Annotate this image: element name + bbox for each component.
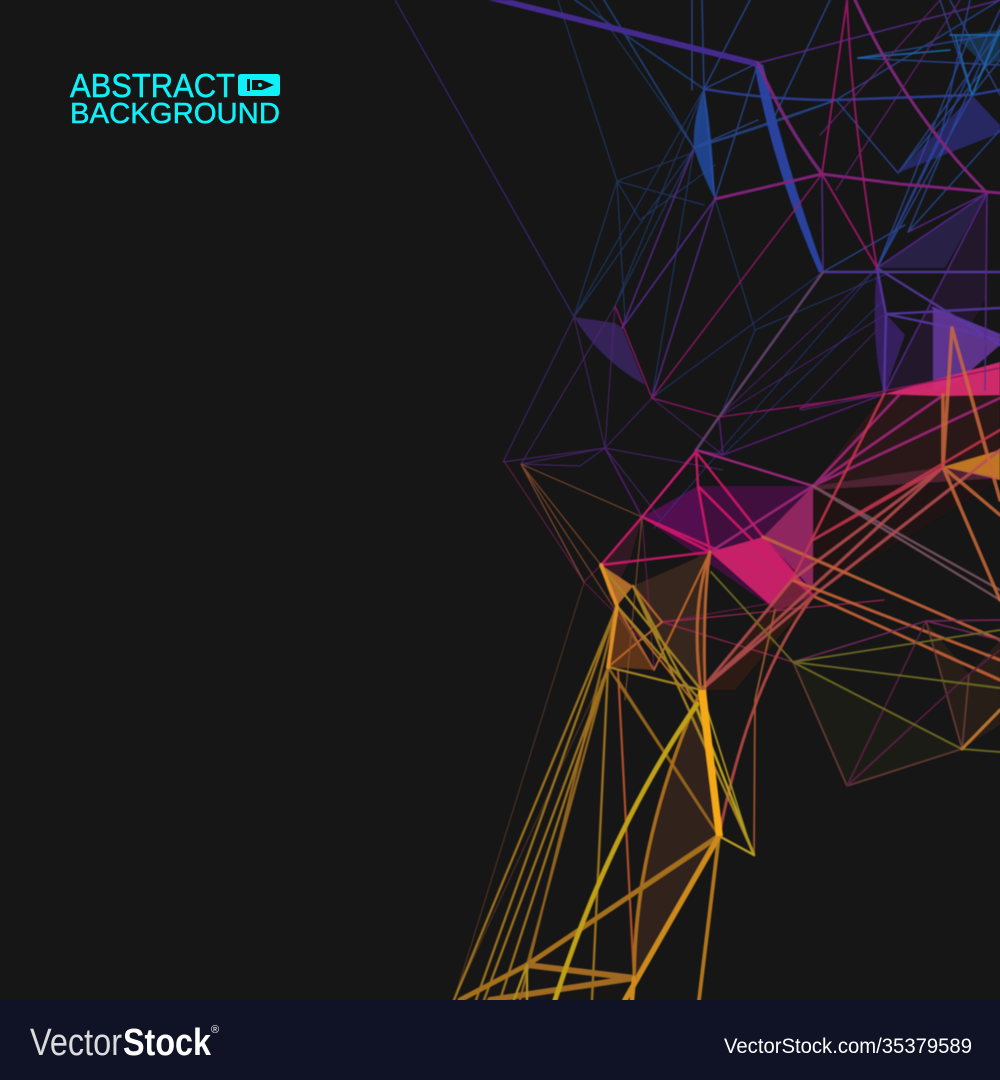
magenta mesh lines xyxy=(504,0,1000,670)
translucent filled facets xyxy=(574,30,1000,978)
purple mesh lines xyxy=(395,0,1000,518)
salmon and orange mesh lines xyxy=(454,328,1000,1000)
registered mark: ® xyxy=(211,1024,219,1036)
thick purple strut xyxy=(488,0,758,67)
title line one: ABSTRACT xyxy=(70,67,235,104)
image id: VectorStock.com/35379589 xyxy=(724,1035,972,1058)
blue mesh lines xyxy=(558,0,1000,528)
thick blue strut xyxy=(755,63,824,272)
VectorStock wordmark light part: Vector xyxy=(30,1022,122,1064)
bright yellow curved strut xyxy=(555,704,697,1000)
polygon network graphic xyxy=(395,0,1000,1000)
gold and yellow mesh lines xyxy=(454,565,1000,1000)
footer bar xyxy=(0,1000,1000,1080)
orange left strut xyxy=(601,565,617,667)
title line two: BACKGROUND xyxy=(70,98,280,130)
title logo xyxy=(70,67,280,130)
icon: pen nib badge xyxy=(238,74,280,96)
bright orange wedge xyxy=(698,690,723,836)
VectorStock wordmark bold part: Stock xyxy=(123,1022,212,1064)
